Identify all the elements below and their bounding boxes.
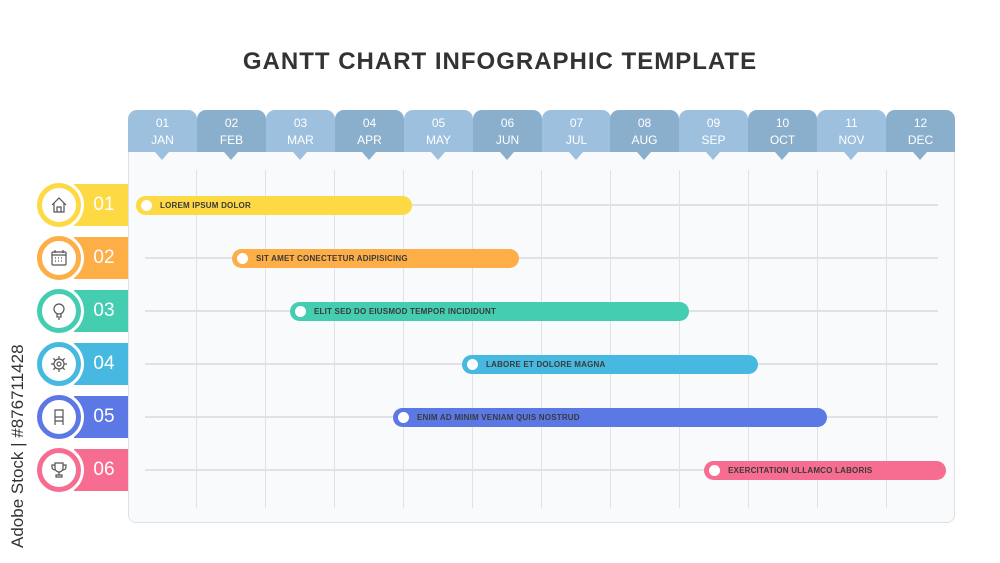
month header: MAY xyxy=(426,133,451,147)
month header: 10 xyxy=(776,116,789,130)
month header xyxy=(128,110,955,160)
label 03: 03 xyxy=(93,300,115,321)
month header: 02 xyxy=(225,116,238,130)
month header: 03 xyxy=(294,116,307,130)
month header: APR xyxy=(357,133,382,147)
month header: JUN xyxy=(496,133,519,147)
label 01: 01 xyxy=(93,194,115,215)
bar 5: ENIM AD MINIM VENIAM QUIS NOSTRUD xyxy=(417,413,580,422)
label 04: 04 xyxy=(93,353,115,374)
month header: 04 xyxy=(363,116,376,130)
bar 1 xyxy=(136,196,412,215)
month header: 11 xyxy=(845,116,858,130)
bar 5 xyxy=(393,408,827,427)
bar 2 xyxy=(232,249,519,268)
month header: 08 xyxy=(638,116,651,130)
month header: 12 xyxy=(914,116,927,130)
month header: MAR xyxy=(287,133,314,147)
watermark side text: Adobe Stock | #876711428 xyxy=(8,344,27,548)
month header: FEB xyxy=(220,133,243,147)
month header: OCT xyxy=(770,133,795,147)
bar 4: LABORE ET DOLORE MAGNA xyxy=(486,360,606,369)
month header: NOV xyxy=(838,133,864,147)
bar 3: ELIT SED DO EIUSMOD TEMPOR INCIDIDUNT xyxy=(314,307,496,316)
label 05: 05 xyxy=(93,406,115,427)
month header: 07 xyxy=(570,116,583,130)
title: GANTT CHART INFOGRAPHIC TEMPLATE xyxy=(243,48,757,75)
panel: chart grid xyxy=(128,140,955,523)
month header: 09 xyxy=(707,116,720,130)
month header: DEC xyxy=(908,133,933,147)
label 06 xyxy=(37,448,128,492)
bar 6: EXERCITATION ULLAMCO LABORIS xyxy=(728,466,872,475)
month header: 05 xyxy=(432,116,445,130)
label 04 xyxy=(37,342,128,386)
month header: JUL xyxy=(566,133,587,147)
month header: JAN xyxy=(151,133,174,147)
label 05 xyxy=(37,395,128,439)
label 02: 02 xyxy=(93,247,115,268)
month header: 06 xyxy=(501,116,514,130)
label 01 xyxy=(37,183,128,227)
label 06: 06 xyxy=(93,459,115,480)
month header: 01 xyxy=(156,116,169,130)
bar 4 xyxy=(462,355,758,374)
label 02 xyxy=(37,236,128,280)
month header: SEP xyxy=(701,133,726,147)
bar 3 xyxy=(290,302,689,321)
label 03 xyxy=(37,289,128,333)
bar 6 xyxy=(704,461,946,480)
bar 2: SIT AMET CONECTETUR ADIPISICING xyxy=(256,254,408,263)
bar 1: LOREM IPSUM DOLOR xyxy=(160,201,251,210)
month header: AUG xyxy=(631,133,658,147)
